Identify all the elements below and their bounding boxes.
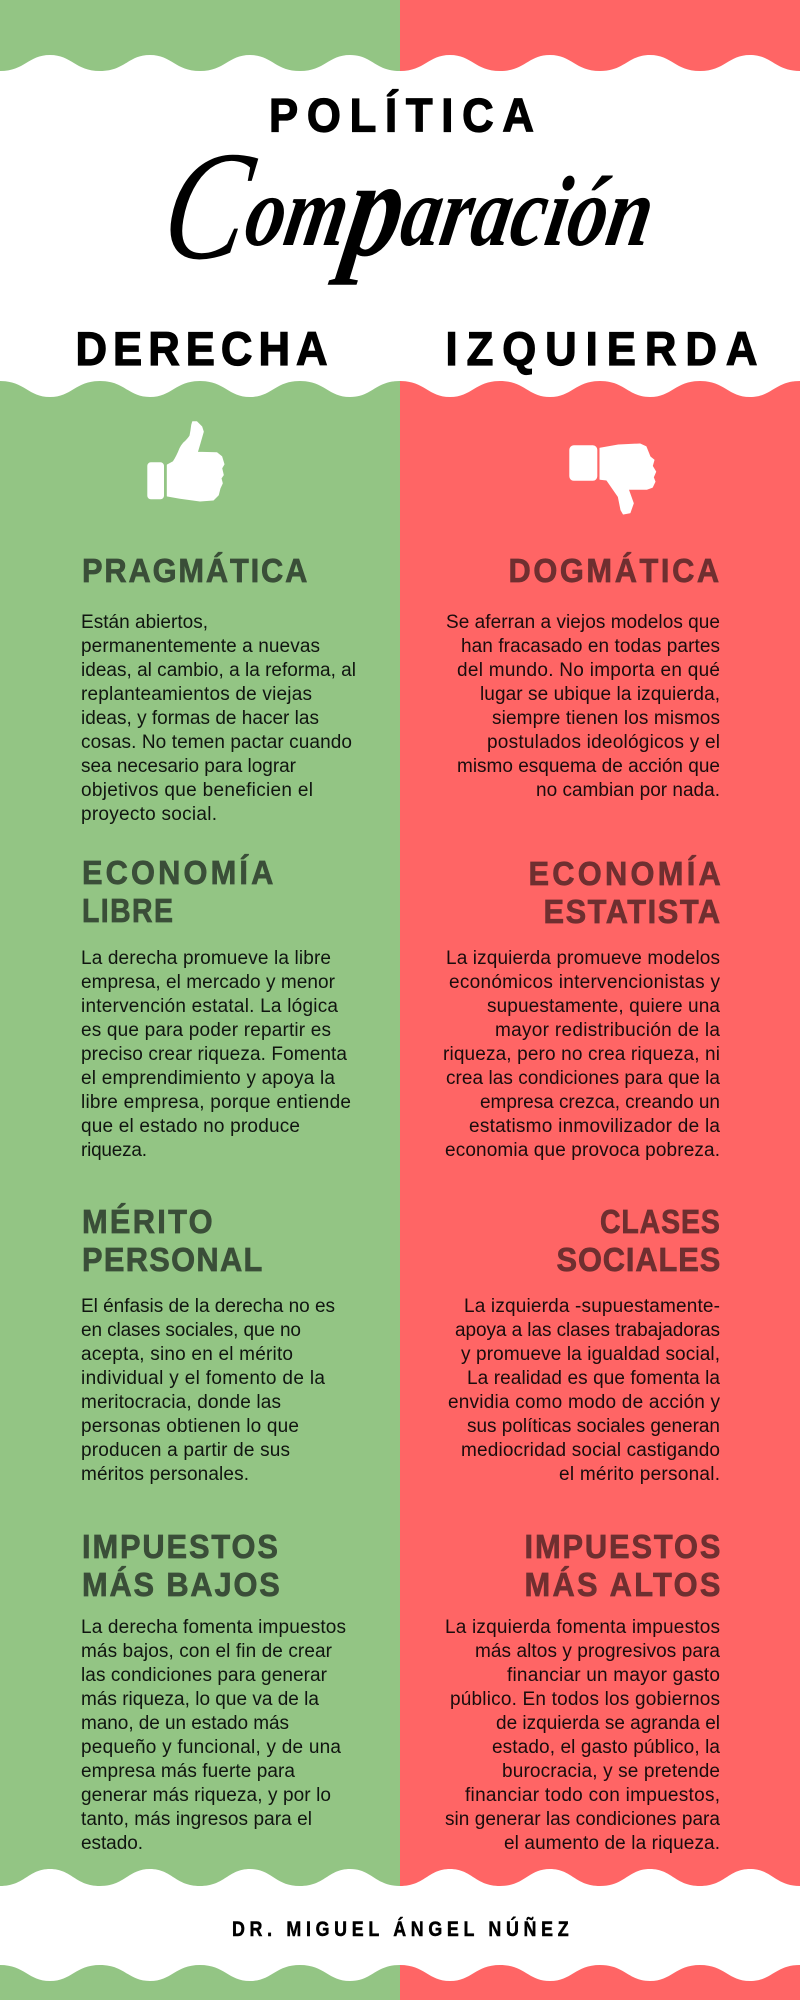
panel: izquierda clases sociales: envidia como modo de acción y bbox=[448, 1392, 720, 1413]
panel: derecha economía libre bbox=[81, 854, 351, 1161]
panel: derecha impuestos más bajos: más bajos, con el fin de crear bbox=[81, 1641, 333, 1662]
icon: thumbs down bbox=[570, 444, 656, 514]
heading: MÉRITO PERSONAL: PERSONAL bbox=[82, 1241, 262, 1278]
panel: izquierda clases sociales: La realidad es que fomenta la bbox=[467, 1368, 720, 1389]
panel: derecha mérito personal: meritocracia, donde las bbox=[81, 1392, 281, 1413]
panel: derecha impuestos más bajos: tanto, más ingresos para el bbox=[81, 1809, 312, 1830]
panel: derecha economía libre: intervención estatal. La lógica bbox=[81, 996, 338, 1017]
panel: derecha impuestos más bajos: estado. bbox=[81, 1833, 143, 1854]
panel: derecha pragmática: cosas. No temen pactar cuando bbox=[81, 732, 352, 753]
panel: izquierda dogmática: postulados ideológicos y el bbox=[487, 732, 720, 753]
panel: derecha pragmática: replanteamientos de viejas bbox=[81, 684, 312, 705]
panel: derecha pragmática: permanentemente a nuevas bbox=[81, 636, 320, 657]
panel: derecha pragmática: objetivos que beneficien el bbox=[81, 780, 313, 801]
heading: ECONOMÍA ESTATISTA bbox=[528, 855, 721, 930]
panel: derecha pragmática: Están abiertos, bbox=[81, 612, 208, 633]
heading: CLASES SOCIALES: CLASES bbox=[600, 1203, 720, 1241]
panel: derecha impuestos más bajos: más riqueza, lo que va de la bbox=[81, 1689, 319, 1710]
panel: izquierda dogmática: del mundo. No importa en qué bbox=[457, 660, 720, 681]
heading: IMPUESTOS MÁS ALTOS: MÁS ALTOS bbox=[524, 1566, 720, 1603]
panel: izquierda impuestos más altos: burocracia, y se pretende bbox=[502, 1761, 720, 1782]
panel: izquierda impuestos más altos bbox=[445, 1528, 720, 1854]
heading: CLASES SOCIALES bbox=[556, 1203, 720, 1278]
panel: derecha economía libre: preciso crear riqueza. Fomenta bbox=[81, 1044, 347, 1065]
panel: izquierda dogmática: lugar se ubique la izquierda, bbox=[480, 684, 720, 705]
panel: izquierda economía estatista: supuestamente, quiere una bbox=[487, 996, 720, 1017]
panel: derecha mérito personal: individual y el fomento de la bbox=[81, 1368, 325, 1389]
heading: MÉRITO PERSONAL bbox=[82, 1203, 262, 1278]
heading: IMPUESTOS MÁS ALTOS: IMPUESTOS bbox=[524, 1528, 720, 1565]
panel: izquierda background bbox=[400, 381, 800, 1886]
panel: izquierda clases sociales: mediocridad social castigando bbox=[461, 1440, 720, 1461]
panel: izquierda economía estatista: estatismo inmovilizador de la bbox=[469, 1116, 720, 1137]
panel: izquierda dogmática: mismo esquema de acción que bbox=[457, 756, 720, 777]
heading: ECONOMÍA ESTATISTA: ECONOMÍA bbox=[528, 855, 721, 892]
heading: CLASES SOCIALES: SOCIALES bbox=[556, 1241, 720, 1278]
panel: izquierda clases sociales: el mérito personal. bbox=[559, 1464, 720, 1485]
panel: derecha mérito personal: personas obtienen lo que bbox=[81, 1416, 299, 1437]
panel: izquierda clases sociales: La izquierda -supuestamente- bbox=[464, 1296, 720, 1317]
panel: derecha pragmática: ideas, al cambio, a la reforma, al bbox=[81, 660, 356, 681]
heading: IMPUESTOS MÁS ALTOS bbox=[524, 1528, 720, 1603]
panel: izquierda economía estatista: económicos intervencionistas y bbox=[449, 972, 720, 993]
heading: DOGMÁTICA: DOGMÁTICA bbox=[508, 552, 719, 589]
panel: derecha impuestos más bajos bbox=[81, 1528, 346, 1854]
panel: derecha pragmática: ideas, y formas de hacer las bbox=[81, 708, 319, 729]
icon: thumbs up bbox=[148, 422, 224, 501]
panel: izquierda economía estatista: La izquierda promueve modelos bbox=[446, 948, 720, 969]
panel: derecha economía libre: libre empresa, porque entiende bbox=[81, 1092, 351, 1113]
heading: IZQUIERDA: IZQUIERDA bbox=[446, 322, 757, 375]
panel: derecha mérito personal: en clases sociales, que no bbox=[81, 1320, 301, 1341]
heading: DERECHA: DERECHA bbox=[76, 322, 328, 375]
panel: derecha mérito personal: méritos personales. bbox=[81, 1464, 249, 1485]
heading: ECONOMÍA LIBRE bbox=[82, 854, 273, 930]
panel: derecha mérito personal: producen a partir de sus bbox=[81, 1440, 290, 1461]
panel: izquierda economía estatista bbox=[443, 855, 721, 1161]
panel: izquierda impuestos más altos: de izquierda se agranda el bbox=[496, 1713, 720, 1734]
panel: izquierda clases sociales bbox=[448, 1203, 720, 1485]
panel: izquierda economía estatista: riqueza, pero no crea riqueza, ni bbox=[443, 1044, 720, 1065]
panel: derecha impuestos más bajos: empresa más fuerte para bbox=[81, 1761, 295, 1782]
panel: derecha economía libre: La derecha promueve la libre bbox=[81, 948, 331, 969]
panel: derecha impuestos más bajos: pequeño y funcional, y de una bbox=[81, 1737, 341, 1758]
panel: izquierda economía estatista: economia que provoca pobreza. bbox=[445, 1140, 720, 1161]
heading: IMPUESTOS MÁS BAJOS bbox=[82, 1528, 280, 1603]
heading: IMPUESTOS MÁS BAJOS: IMPUESTOS bbox=[82, 1528, 278, 1565]
panel: izquierda economía estatista: empresa crezca, creando un bbox=[480, 1092, 720, 1113]
panel: izquierda dogmática bbox=[446, 552, 720, 801]
panel: izquierda clases sociales: apoya a las clases trabajadoras bbox=[455, 1320, 720, 1341]
panel: izquierda impuestos más altos: La izquierda fomenta impuestos bbox=[445, 1617, 720, 1638]
top wavy band bbox=[0, 0, 800, 71]
bottom wavy band bbox=[0, 1965, 800, 2000]
panel: izquierda impuestos más altos: estado, el gasto público, la bbox=[492, 1737, 720, 1758]
panel: izquierda impuestos más altos: público. En todos los gobiernos bbox=[450, 1689, 720, 1710]
panel: derecha impuestos más bajos: las condiciones para generar bbox=[81, 1665, 328, 1686]
panel: derecha background bbox=[0, 381, 400, 1886]
panel: izquierda impuestos más altos: sin generar las condiciones para bbox=[445, 1809, 720, 1830]
panel: izquierda economía estatista: mayor redistribución de la bbox=[495, 1020, 720, 1041]
heading: ECONOMÍA LIBRE: LIBRE bbox=[82, 892, 173, 930]
panel: izquierda dogmática: no cambian por nada. bbox=[536, 780, 720, 801]
panel: derecha impuestos más bajos: generar más riqueza, y por lo bbox=[81, 1785, 331, 1806]
panel: derecha mérito personal: El énfasis de la derecha no es bbox=[81, 1296, 335, 1317]
panel: izquierda impuestos más altos: el aumento de la riqueza. bbox=[504, 1833, 720, 1854]
panel: derecha pragmática bbox=[81, 552, 356, 825]
panel: derecha mérito personal: acepta, sino en el mérito bbox=[81, 1344, 293, 1365]
heading: IMPUESTOS MÁS BAJOS: MÁS BAJOS bbox=[82, 1566, 280, 1603]
panel: izquierda clases sociales: y promueve la igualdad social, bbox=[461, 1344, 720, 1365]
title: Comparación: om bbox=[238, 156, 358, 267]
panel: izquierda impuestos más altos: financiar un mayor gasto bbox=[507, 1665, 720, 1686]
panel: derecha economía libre: el emprendimiento y apoya la bbox=[81, 1068, 335, 1089]
title: Comparación: aración bbox=[394, 156, 663, 267]
title: Comparación: C bbox=[152, 120, 266, 293]
panel: derecha pragmática: sea necesario para lograr bbox=[81, 756, 297, 777]
panel: izquierda economía estatista: crea las condiciones para que la bbox=[446, 1068, 720, 1089]
panel: izquierda impuestos más altos: más altos y progresivos para bbox=[475, 1641, 720, 1662]
panel: izquierda dogmática: siempre tienen los mismos bbox=[492, 708, 720, 729]
heading: ECONOMÍA ESTATISTA: ESTATISTA bbox=[544, 893, 720, 930]
panel: derecha impuestos más bajos: mano, de un estado más bbox=[81, 1713, 289, 1734]
panel: derecha economía libre: empresa, el mercado y menor bbox=[81, 972, 336, 993]
panel: derecha economía libre: es que para poder repartir es bbox=[81, 1020, 331, 1041]
heading: ECONOMÍA LIBRE: ECONOMÍA bbox=[82, 854, 273, 891]
panel: derecha mérito personal bbox=[81, 1203, 335, 1485]
title: POLÍTICA: POLÍTICA bbox=[269, 89, 534, 142]
panel: derecha pragmática: proyecto social. bbox=[81, 804, 217, 825]
panel: izquierda impuestos más altos: financiar todo con impuestos, bbox=[465, 1785, 720, 1806]
panel: derecha economía libre: riqueza. bbox=[81, 1140, 147, 1161]
panel: derecha economía libre: que el estado no produce bbox=[81, 1116, 300, 1137]
title: Comparación: p bbox=[327, 130, 418, 286]
panel: derecha impuestos más bajos: La derecha fomenta impuestos bbox=[81, 1617, 346, 1638]
panel: izquierda dogmática: han fracasado en todas partes bbox=[461, 636, 720, 657]
panel: izquierda dogmática: Se aferran a viejos modelos que bbox=[446, 612, 720, 633]
heading: MÉRITO PERSONAL: MÉRITO bbox=[82, 1203, 213, 1240]
footer author: DR. MIGUEL ÁNGEL NÚÑEZ bbox=[232, 1916, 569, 1941]
heading: PRAGMÁTICA: PRAGMÁTICA bbox=[82, 552, 307, 589]
panel: izquierda clases sociales: sus políticas sociales generan bbox=[467, 1416, 720, 1437]
